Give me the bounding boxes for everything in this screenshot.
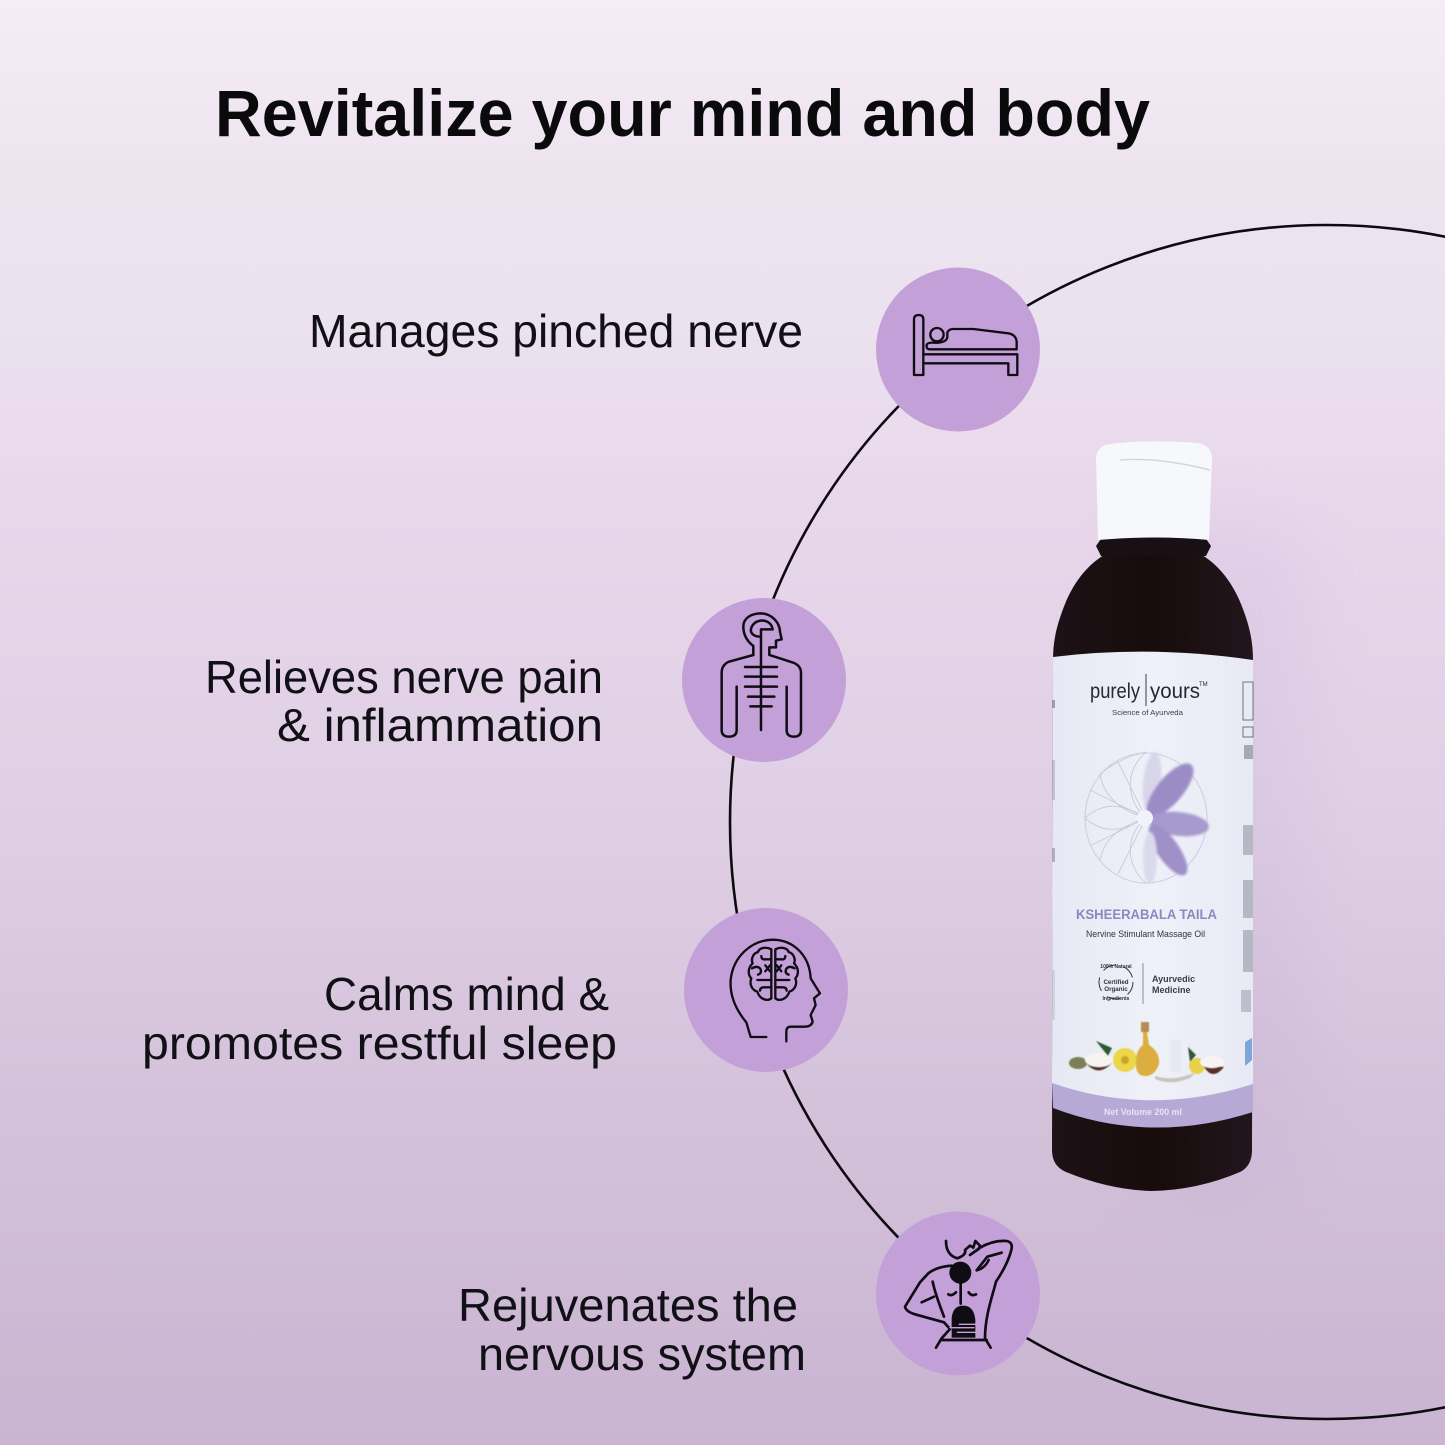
bottle shadow — [1120, 520, 1310, 1210]
label band — [1052, 1080, 1253, 1128]
icon circle: nervous system — [682, 598, 846, 762]
icon: head with brain — [731, 940, 820, 1041]
brand logo — [1090, 674, 1208, 717]
organic badge: Certified — [1103, 979, 1129, 986]
organic badge: Ingredients — [1103, 996, 1130, 1002]
label: promotes restful sleep — [142, 1017, 617, 1069]
net volume: Net Volume 200 ml — [1104, 1107, 1182, 1117]
label: Calms mind & — [324, 968, 609, 1020]
side label text — [1052, 682, 1253, 1066]
mandala flower — [1085, 751, 1210, 884]
icon circle: bed — [876, 268, 1040, 432]
icon circle: brain — [684, 908, 848, 1072]
label — [205, 651, 603, 751]
organic badge — [1099, 964, 1133, 1002]
label: nervous system — [478, 1328, 806, 1380]
product name: KSHEERABALA TAILA — [1076, 907, 1217, 922]
label: Relieves nerve pain — [205, 651, 603, 703]
product bottle — [1052, 441, 1253, 1191]
brand logo: TM — [1199, 682, 1208, 688]
title: Revitalize your mind and body — [215, 76, 1150, 150]
icon circle: massage — [876, 1212, 1040, 1376]
label — [458, 1279, 806, 1380]
item: calms mind — [142, 908, 848, 1072]
bottle neck flange — [1096, 536, 1211, 556]
label: Rejuvenates the — [458, 1279, 798, 1331]
ayurvedic medicine: Ayurvedic — [1152, 974, 1195, 984]
ayurvedic medicine — [1152, 974, 1195, 995]
icon: back massage — [905, 1241, 1012, 1348]
brand logo: Science of Ayurveda — [1112, 708, 1184, 717]
item: relieves nerve pain — [205, 598, 846, 762]
item: rejuvenates nervous system — [458, 1212, 1040, 1380]
item: manages pinched nerve — [309, 268, 1040, 432]
icon: human nervous system — [722, 613, 801, 737]
organic badge: 100% Natural — [1100, 964, 1132, 970]
cap — [1096, 441, 1212, 540]
organic badge: Organic — [1104, 986, 1128, 993]
label — [1052, 652, 1253, 1100]
product subtitle: Nervine Stimulant Massage Oil — [1086, 929, 1205, 940]
ayurvedic medicine: Medicine — [1152, 985, 1191, 995]
connecting arc — [730, 225, 1445, 1419]
ingredients illustration — [1069, 1022, 1224, 1082]
bottle glass — [1052, 555, 1253, 1191]
label: Manages pinched nerve — [309, 305, 803, 357]
icon: bed — [914, 315, 1017, 375]
brand logo: purely — [1090, 680, 1140, 703]
label: & inflammation — [277, 699, 603, 751]
label — [142, 968, 617, 1069]
brand logo: yours — [1150, 680, 1200, 703]
